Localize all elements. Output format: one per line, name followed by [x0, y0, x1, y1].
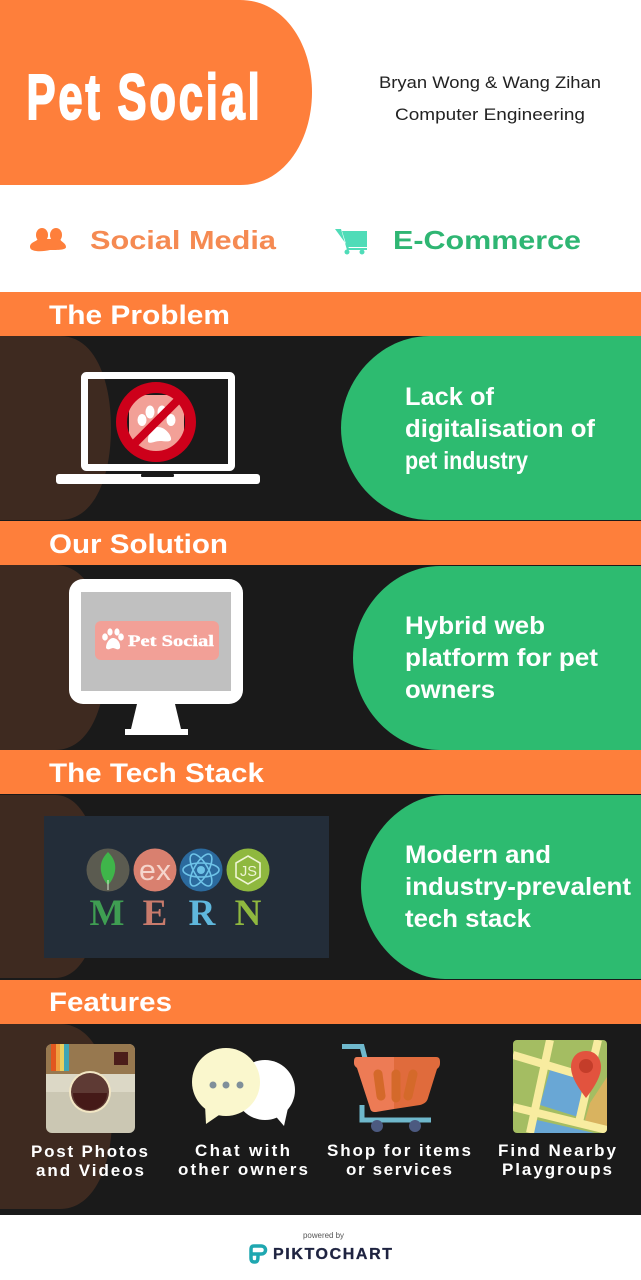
icon: camera: [46, 1044, 135, 1133]
solution text: Hybrid web: [405, 612, 545, 640]
problem text: [405, 383, 596, 475]
panel: the problem: [0, 336, 641, 521]
heading bar: features: Features: [49, 987, 172, 1017]
heading bar: our solution: Our Solution: [49, 529, 228, 559]
feature labels: other owners: [178, 1160, 308, 1179]
icon: laptop with prohibited paw: [56, 376, 260, 484]
heading bar: the problem: The Problem: [49, 300, 230, 330]
heading bar: features: [0, 980, 641, 1024]
MERN logo: ex: [139, 855, 172, 887]
panel: features: [0, 1024, 641, 1215]
heading bar: the problem: [0, 292, 641, 336]
icon: people: [30, 228, 66, 251]
authors: Computer Engineering: [395, 105, 585, 124]
footer: powered by piktochart: [251, 1231, 392, 1263]
feature labels: Chat with: [195, 1141, 290, 1160]
problem text: Lack of: [405, 383, 495, 411]
tech stack text: [405, 841, 632, 933]
problem text: digitalisation of: [405, 415, 596, 443]
icon: monitor with logo: Pet Social: [128, 633, 215, 650]
MERN logo: JS: [240, 863, 257, 880]
icon: monitor with logo: [69, 579, 243, 735]
green pill: solution: [353, 566, 641, 750]
MERN logo: [44, 816, 329, 958]
MERN logo: R: [189, 893, 217, 934]
green pill: tech stack: [361, 795, 641, 979]
panel: the tech stack: [0, 794, 641, 981]
problem text: pet industry: [405, 447, 528, 475]
footer: powered by piktochart: PIKTOCHART: [273, 1246, 392, 1263]
solution text: platform for pet: [405, 644, 599, 672]
feature labels: Playgroups: [502, 1160, 612, 1179]
heading bar: our solution: [0, 521, 641, 565]
MERN logo: N: [235, 893, 262, 934]
feature labels: Shop for items: [327, 1141, 471, 1160]
feature labels: and Videos: [36, 1161, 144, 1180]
authors: Bryan Wong & Wang Zihan: [379, 73, 601, 92]
icon: shopping basket: [342, 1046, 440, 1132]
icon: shopping cart: [335, 229, 367, 254]
tech stack text: industry-prevalent: [405, 873, 632, 901]
heading bar: the tech stack: The Tech Stack: [49, 758, 265, 788]
icon: map with pin: [513, 1040, 607, 1135]
header shape: [0, 0, 312, 185]
panel: our solution: [0, 565, 641, 751]
tech stack text: tech stack: [405, 905, 531, 933]
e-commerce label: E-Commerce: [393, 225, 581, 255]
green pill: problem: [341, 336, 641, 520]
heading bar: the tech stack: [0, 750, 641, 794]
icon: chat bubbles: [192, 1048, 295, 1126]
solution text: owners: [405, 676, 495, 704]
footer: powered by piktochart: powered by: [303, 1231, 344, 1240]
feature labels: Find Nearby: [498, 1141, 617, 1160]
feature labels: or services: [346, 1160, 452, 1179]
MERN logo: E: [143, 893, 167, 934]
feature labels: Post Photos: [31, 1142, 148, 1161]
tech stack text: Modern and: [405, 841, 551, 869]
icon: piktochart logo: [251, 1246, 266, 1262]
solution text: [405, 612, 599, 704]
MERN logo: M: [90, 893, 124, 934]
title: Pet Social: [27, 61, 260, 133]
social media label: Social Media: [90, 225, 277, 255]
authors: [379, 73, 601, 124]
feature labels: [31, 1141, 617, 1180]
